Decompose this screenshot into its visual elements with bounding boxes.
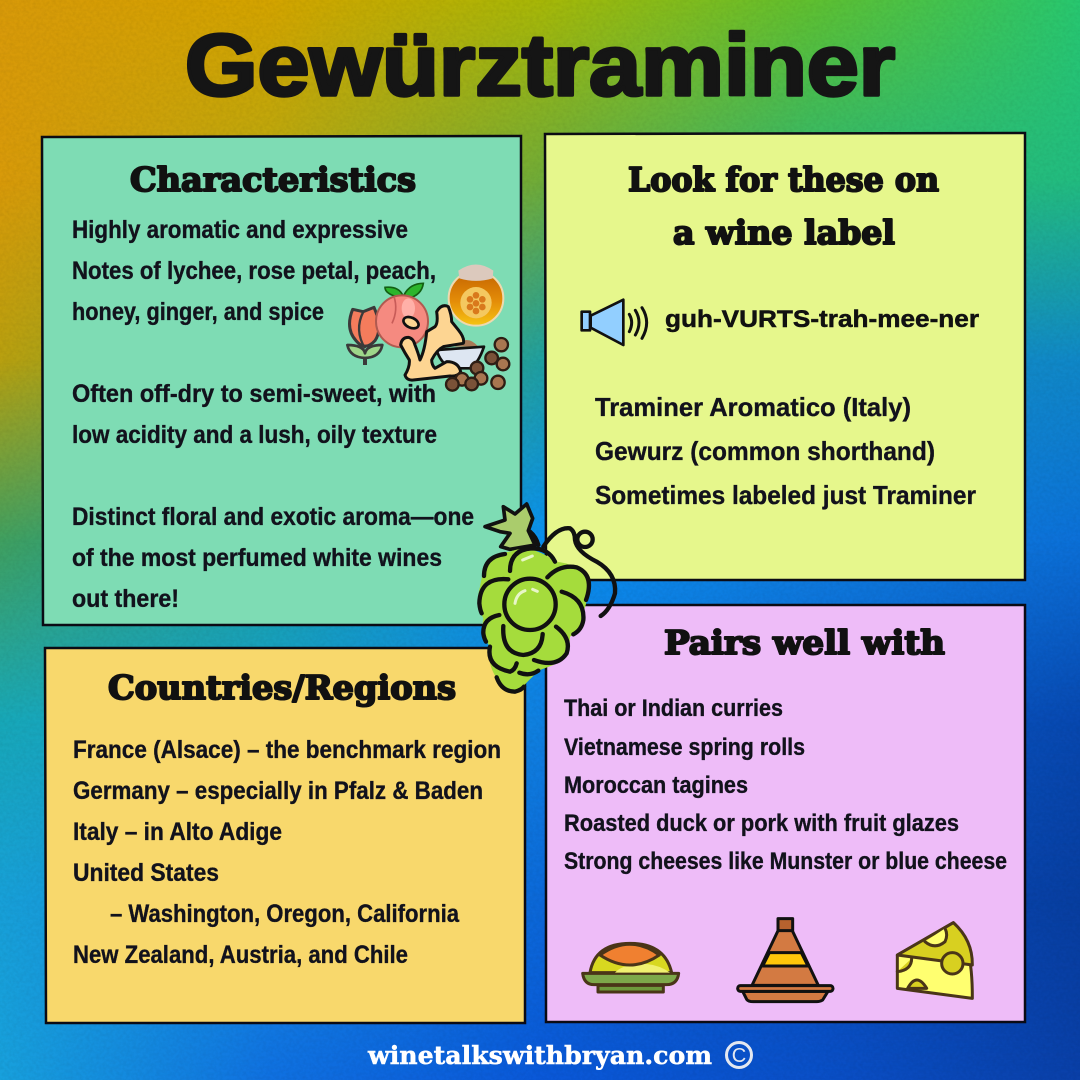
text: countries list — [73, 736, 501, 969]
text: countries list: New Zealand, Austria, and Chile — [73, 941, 408, 969]
footer: website: winetalkswithbryan.com — [367, 1041, 712, 1070]
text: pairing list: Roasted duck or pork with fruit glazes — [564, 810, 959, 837]
text: countries list: – Washington, Oregon, California — [110, 900, 460, 928]
icon: rose — [347, 307, 382, 365]
text: label names: Sometimes labeled just Traminer — [595, 480, 976, 510]
text: pairing list: Vietnamese spring rolls — [564, 734, 805, 761]
icon: spice balls — [446, 338, 509, 391]
text: label names — [595, 392, 976, 510]
text: countries list: United States — [73, 859, 219, 887]
text: characteristics list: out there! — [72, 585, 179, 613]
heading: pairs well with: Pairs well with — [664, 623, 945, 662]
text: characteristics list: of the most perfumed white wines — [72, 544, 442, 572]
icon: ginger — [401, 306, 464, 380]
icon: grape bunch outlines — [479, 528, 615, 692]
heading: characteristics: Characteristics — [130, 160, 416, 199]
icon: cheese wedge — [897, 923, 972, 998]
icon: speaker — [582, 300, 647, 345]
icon: ginger nub — [402, 315, 420, 331]
panel: characteristics — [42, 136, 521, 625]
text: characteristics list: Highly aromatic and expressive — [72, 216, 408, 244]
panel: pairs well with — [546, 605, 1025, 1022]
icon: aromatics (rose, peach, honey, ginger, spice) — [347, 264, 509, 391]
icon: copyright — [726, 1042, 752, 1068]
heading: look for these on a wine label: a wine label — [673, 213, 895, 252]
text: pronunciation: guh-VURTS-trah-mee-ner — [665, 306, 979, 333]
icon: spice bowl — [437, 340, 484, 368]
heading: look for these on a wine label: Look for these on — [628, 160, 939, 199]
heading: look for these on a wine label — [628, 160, 939, 252]
icon: grape leaf — [485, 504, 535, 549]
text: countries list: France (Alsace) – the benchmark region — [73, 736, 501, 764]
icon: grape highlights — [515, 556, 537, 603]
heading: countries/regions: Countries/Regions — [108, 668, 456, 707]
text: pairing list — [564, 695, 1007, 875]
text: label names: Gewurz (common shorthand) — [595, 436, 935, 466]
text: characteristics list: Often off-dry to semi-sweet, with — [72, 380, 436, 408]
text: pairing list: Moroccan tagines — [564, 772, 748, 799]
icon: grape bunch fill — [478, 549, 588, 690]
panel: countries and regions — [45, 648, 525, 1023]
text: characteristics list: Distinct floral and exotic aroma—one — [72, 503, 474, 531]
icon: grape cluster — [478, 504, 615, 692]
icon: copyright: C — [732, 1045, 746, 1067]
text: countries list: Italy – in Alto Adige — [73, 818, 282, 846]
text: characteristics list — [72, 216, 474, 613]
text: characteristics list: low acidity and a lush, oily texture — [72, 421, 437, 449]
text: characteristics list: Notes of lychee, rose petal, peach, — [72, 257, 436, 285]
icon: peach — [376, 283, 428, 347]
icon: tagine — [738, 919, 833, 1002]
text: pairing list: Thai or Indian curries — [564, 695, 783, 722]
text: characteristics list: honey, ginger, and spice — [72, 298, 324, 326]
text: label names: Traminer Aromatico (Italy) — [595, 392, 911, 422]
text: pairing list: Strong cheeses like Munster or blue cheese — [564, 848, 1007, 875]
text: countries list: Germany – especially in Pfalz & Baden — [73, 777, 483, 805]
panel: wine label — [545, 133, 1025, 580]
icon: curry plate — [583, 943, 679, 992]
title: Gewürztraminer — [185, 17, 895, 114]
icon: honey jar — [449, 264, 503, 326]
